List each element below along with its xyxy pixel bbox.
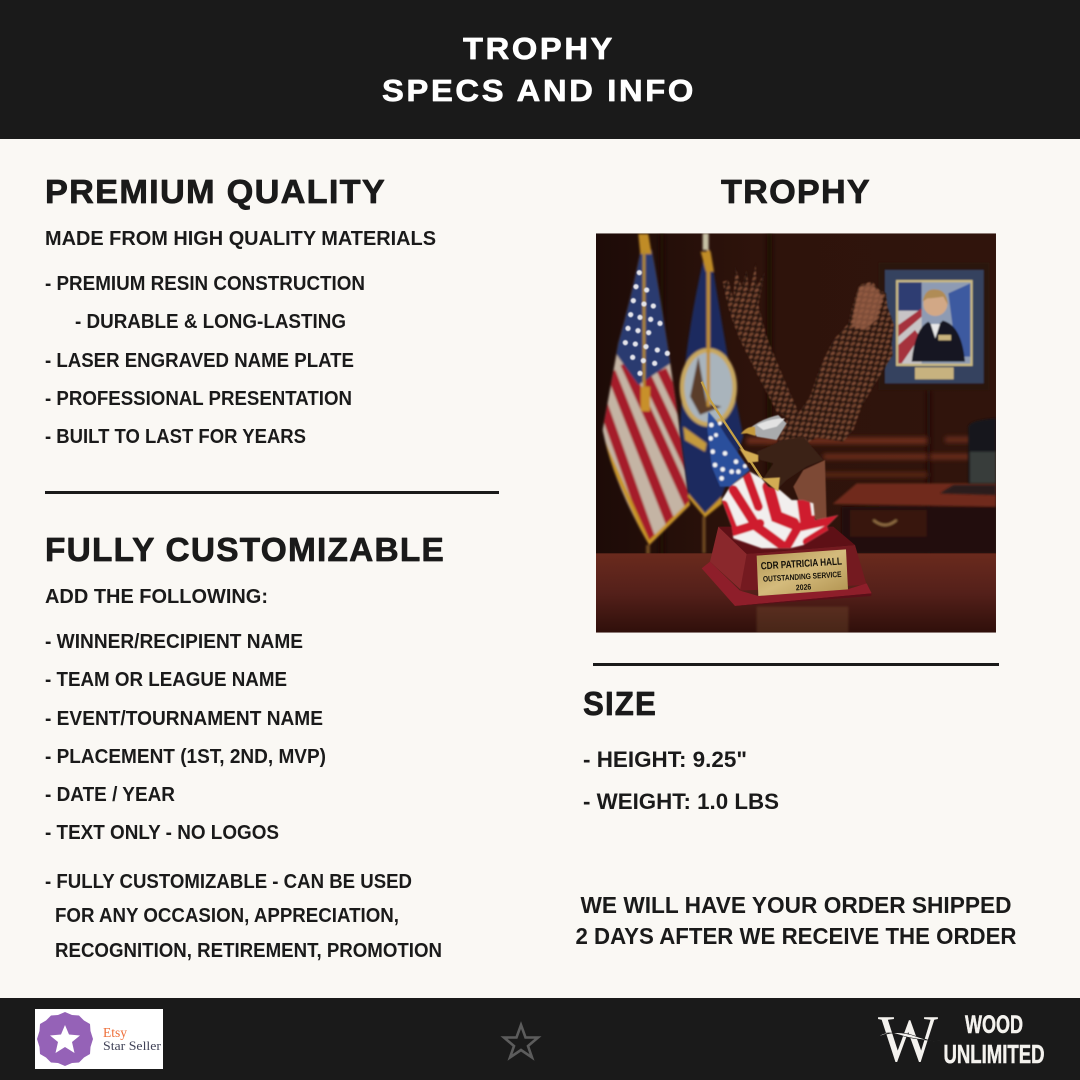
customizable list: - TEAM OR LEAGUE NAME — [45, 669, 287, 691]
premium quality list: - PREMIUM RESIN CONSTRUCTION — [45, 273, 365, 295]
framed portrait — [884, 268, 985, 385]
miniature flag — [707, 412, 838, 548]
icon: outline star — [504, 1025, 538, 1058]
customizable list: ADD THE FOLLOWING: — [45, 586, 268, 608]
heading: trophy: TROPHY — [721, 173, 871, 210]
eagle body — [757, 437, 823, 490]
wooden base — [702, 527, 872, 606]
logo monogram: W — [878, 1002, 939, 1076]
chair — [940, 418, 996, 495]
header band — [0, 0, 1080, 139]
customizable list: RECOGNITION, RETIREMENT, PROMOTION — [55, 940, 442, 962]
heading: premium quality: PREMIUM QUALITY — [45, 173, 386, 210]
brass plate — [757, 549, 848, 596]
wood unlimited logo — [878, 1002, 1044, 1076]
eagle right wing — [777, 282, 894, 447]
american flag background — [601, 233, 692, 554]
header title: SPECS AND INFO — [382, 73, 696, 108]
panel: premium quality — [45, 173, 436, 448]
premium quality list: MADE FROM HIGH QUALITY MATERIALS — [45, 228, 436, 250]
premium quality list — [45, 228, 436, 448]
eagle talons — [739, 448, 780, 492]
shipping note: 2 DAYS AFTER WE RECEIVE THE ORDER — [576, 923, 1017, 949]
customizable list: - PLACEMENT (1ST, 2ND, MVP) — [45, 746, 326, 768]
trophy — [702, 263, 894, 606]
eagle head — [741, 415, 787, 440]
icon: purple seal — [37, 1012, 93, 1066]
header title — [382, 31, 696, 108]
wing highlight — [852, 284, 883, 330]
premium quality list: - DURABLE & LONG-LASTING — [75, 311, 346, 333]
size list: - WEIGHT: 1.0 LBS — [583, 789, 779, 814]
shipping note — [576, 892, 1017, 949]
etsy label: Etsy — [103, 1026, 127, 1041]
footer band — [0, 998, 1080, 1080]
navy flag background — [680, 233, 743, 553]
customizable list: - FULLY CUSTOMIZABLE - CAN BE USED — [45, 871, 412, 893]
desk — [833, 483, 996, 553]
logo wordmark: WOOD — [965, 1011, 1023, 1039]
star seller label: Star Seller — [103, 1038, 162, 1053]
heading: size: SIZE — [583, 685, 657, 722]
size list: - HEIGHT: 9.25" — [583, 747, 747, 772]
logo wordmark — [944, 1011, 1044, 1069]
customizable list: - EVENT/TOURNAMENT NAME — [45, 708, 323, 730]
premium quality list: - PROFESSIONAL PRESENTATION — [45, 388, 352, 410]
etsy star seller badge — [35, 1009, 163, 1069]
brass plate: 2026 — [796, 582, 812, 592]
table — [596, 553, 996, 633]
panel: fully customizable — [45, 531, 445, 962]
premium quality list: - BUILT TO LAST FOR YEARS — [45, 426, 306, 448]
bronze stump — [793, 460, 827, 520]
customizable list — [45, 586, 442, 962]
flag stars — [623, 270, 670, 376]
panel: size — [583, 685, 779, 814]
shipping note: WE WILL HAVE YOUR ORDER SHIPPED — [580, 892, 1012, 918]
size list — [583, 747, 779, 814]
brass plate: CDR PATRICIA HALL — [761, 556, 842, 573]
trophy photo — [596, 233, 996, 633]
miniature flag pole — [702, 382, 762, 478]
brass plate: OUTSTANDING SERVICE — [763, 570, 842, 584]
heading: fully customizable: FULLY CUSTOMIZABLE — [45, 531, 445, 568]
customizable list: - WINNER/RECIPIENT NAME — [45, 631, 303, 653]
eagle left wing — [723, 263, 798, 422]
customizable list: - DATE / YEAR — [45, 784, 176, 806]
premium quality list: - LASER ENGRAVED NAME PLATE — [45, 350, 354, 372]
header title: TROPHY — [463, 31, 615, 66]
office background — [596, 233, 996, 557]
customizable list: FOR ANY OCCASION, APPRECIATION, — [55, 905, 399, 927]
customizable list: - TEXT ONLY - NO LOGOS — [45, 822, 279, 844]
